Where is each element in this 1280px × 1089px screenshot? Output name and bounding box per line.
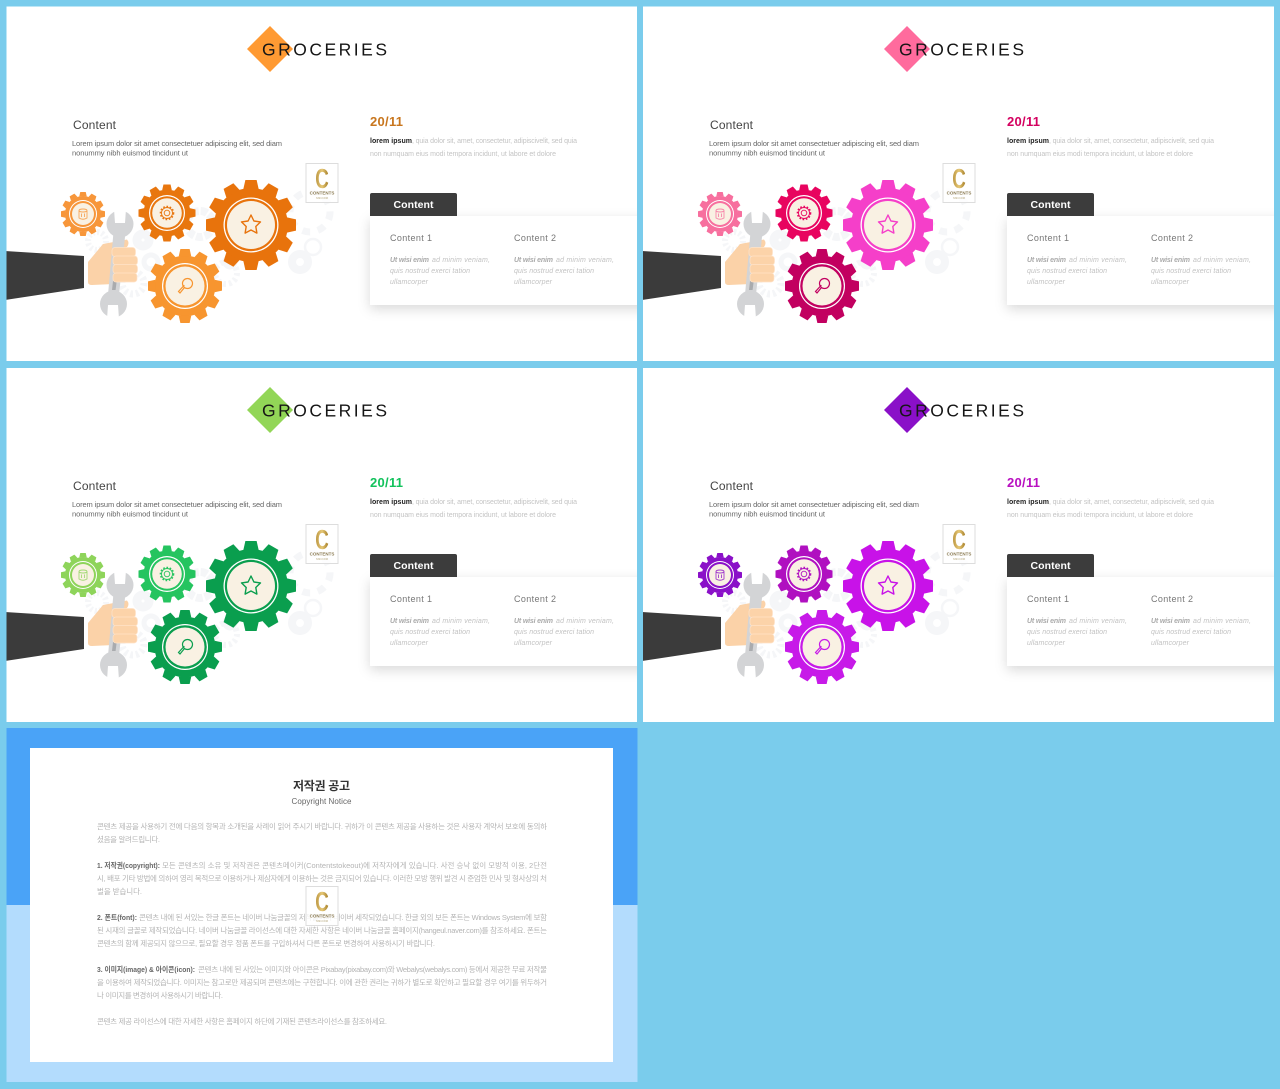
column 1 xyxy=(1027,594,1127,647)
gear: settings xyxy=(776,546,832,602)
logo stamp: C xyxy=(952,525,966,555)
background gears xyxy=(88,192,330,294)
column 1 xyxy=(390,233,490,286)
column 1: Content 1 xyxy=(1027,233,1069,243)
tab xyxy=(1007,193,1094,216)
date description xyxy=(370,499,577,519)
title: GROCERIES xyxy=(262,400,387,420)
tab xyxy=(370,193,457,216)
background gears xyxy=(725,553,967,655)
gear: star xyxy=(206,180,296,270)
tab xyxy=(370,554,457,577)
date description: lorem ipsum xyxy=(370,499,412,506)
left body text: Lorem ipsum dolor sit amet consectetuer adipiscing elit, sed diam xyxy=(72,139,282,148)
left body text xyxy=(72,139,282,158)
notice closing line: 콘텐츠 제공 라이선스에 대한 자세한 사항은 홈페이지 하단에 기재된 콘텐츠라이선스를 참조하세요. xyxy=(97,1016,387,1026)
left body text: nonummy nibh euismod tincidunt ut xyxy=(72,148,189,158)
left body text: Lorem ipsum dolor sit amet consectetuer adipiscing elit, sed diam xyxy=(709,139,919,148)
left body text: nonummy nibh euismod tincidunt ut xyxy=(709,510,826,518)
logo stamp: C xyxy=(952,164,966,194)
date description: lorem ipsum xyxy=(1007,138,1049,145)
notice clause 3: 을 이용하여 제작되었습니다. 이미지는 참고로만 제공되며 콘텐츠에는 구현합니다. 이에 관한 권리는 귀하가 별도로 확인하고 필요할 경우 여기를 위두하거 xyxy=(97,977,547,987)
left body text xyxy=(72,500,282,518)
notice clause 1: 시, 배포 기타 방법에 의하여 영리 목적으로 이용하거나 제삼자에게 이용하는 것은 금지되어 있습니다. 이러한 모방 행위 발견 시 준엄한 민사 및 형사상의 처 xyxy=(97,873,547,883)
date: 20/11 xyxy=(370,475,403,490)
tab: Content xyxy=(1030,199,1071,211)
column 1: Ut wisi enim xyxy=(1027,257,1066,264)
arm with wrench xyxy=(5,209,138,319)
notice clause 1: 모든 콘텐츠의 소유 및 저작권은 콘텐츠메이커(Contentstokeout)에 저작자에게 있습니다. 사전 승낙 없이 모방적 이용, 2단전 xyxy=(162,860,547,870)
card xyxy=(1007,216,1280,305)
left heading: Content xyxy=(73,118,117,132)
logo stamp xyxy=(306,886,338,926)
arm with wrench xyxy=(642,209,774,319)
gear: search xyxy=(148,610,222,684)
date description: , quia dolor sit, amet, consectetur, adipiscivelit, sed quia xyxy=(1049,499,1214,506)
date description xyxy=(1007,138,1214,158)
date description: non numquam eius modi tempora incidunt, ut labore et dolore xyxy=(1007,512,1193,519)
column 2: quis nostrud exerci tation xyxy=(514,268,594,275)
icon: orange diamond xyxy=(247,26,293,72)
logo stamp: CONTENTS xyxy=(947,190,971,196)
panel: pink groceries slide xyxy=(642,6,1280,362)
logo stamp: NNN.COM xyxy=(316,920,328,923)
column 1: ad minim veniam, xyxy=(432,618,490,625)
column 1: Content 1 xyxy=(390,233,432,243)
gear: trash xyxy=(61,553,105,597)
title: GROCERIES xyxy=(899,400,1024,420)
column 1: quis nostrud exerci tation xyxy=(390,268,470,275)
notice clause 2: 2. 폰트(font): xyxy=(97,913,137,922)
logo stamp: C xyxy=(315,887,329,917)
logo stamp: CONTENTS xyxy=(310,552,334,556)
gear: settings xyxy=(138,184,196,242)
column 1: quis nostrud exerci tation xyxy=(1027,268,1107,275)
column 2: ad minim veniam, xyxy=(1193,257,1251,264)
notice intro xyxy=(97,821,547,844)
logo stamp xyxy=(306,524,338,564)
column 2: quis nostrud exerci tation xyxy=(1151,629,1231,636)
left body text xyxy=(709,500,919,518)
date description: , quia dolor sit, amet, consectetur, adipiscivelit, sed quia xyxy=(412,138,577,145)
column 1: ullamcorper xyxy=(390,640,429,647)
column 2: Content 2 xyxy=(1151,594,1193,604)
column 1: Content 1 xyxy=(1027,594,1069,604)
background gears xyxy=(88,553,330,655)
left heading: Content xyxy=(710,118,754,132)
notice clause 3: 3. 이미지(image) & 아이콘(icon): xyxy=(97,964,195,974)
gear: search xyxy=(785,249,859,323)
date description: non numquam eius modi tempora incidunt, ut labore et dolore xyxy=(370,512,556,519)
date description: non numquam eius modi tempora incidunt, ut labore et dolore xyxy=(370,151,556,158)
notice clause 1: 벌을 받습니다. xyxy=(97,886,142,896)
logo stamp: C xyxy=(315,525,329,555)
gear: star xyxy=(843,541,933,631)
gear: search xyxy=(785,610,859,684)
column 2 xyxy=(1151,594,1251,647)
tab: Content xyxy=(394,199,434,211)
icon: green diamond xyxy=(247,387,293,433)
date: 20/11 xyxy=(370,114,403,129)
column 1 xyxy=(1027,233,1127,286)
column 2: ad minim veniam, xyxy=(1193,618,1251,625)
logo stamp: NNN.COM xyxy=(316,197,328,200)
date description: non numquam eius modi tempora incidunt, ut labore et dolore xyxy=(1007,151,1193,158)
tab xyxy=(1007,554,1094,577)
title: GROCERIES xyxy=(262,40,387,60)
left body text: nonummy nibh euismod tincidunt ut xyxy=(709,148,826,158)
icon: pink diamond xyxy=(884,26,930,72)
column 1: ullamcorper xyxy=(1027,640,1066,647)
logo stamp: CONTENTS xyxy=(310,914,334,918)
column 1: quis nostrud exerci tation xyxy=(390,629,470,636)
column 2 xyxy=(514,594,614,647)
logo stamp xyxy=(943,164,975,202)
date description xyxy=(370,138,577,158)
column 1: ad minim veniam, xyxy=(1069,257,1127,264)
column 2: Ut wisi enim xyxy=(1151,257,1190,264)
column 2: quis nostrud exerci tation xyxy=(514,629,594,636)
gear: trash xyxy=(698,553,742,597)
column 2: ad minim veniam, xyxy=(556,618,614,625)
column 2: ullamcorper xyxy=(514,640,553,647)
logo stamp: CONTENTS xyxy=(947,552,971,556)
left heading: Content xyxy=(710,479,754,493)
logo stamp xyxy=(943,524,975,564)
column 2: Content 2 xyxy=(514,233,556,243)
left body text: Lorem ipsum dolor sit amet consectetuer adipiscing elit, sed diam xyxy=(72,500,282,509)
card xyxy=(370,216,650,305)
logo stamp: CONTENTS xyxy=(310,190,334,196)
date description xyxy=(1007,499,1214,519)
left body text xyxy=(709,139,919,158)
left body text: nonummy nibh euismod tincidunt ut xyxy=(72,510,189,518)
notice intro: 콘텐츠 제공을 사용하기 전에 다음의 항목과 소개된을 사례이 읽어 주시기 바랍니다. 귀하가 이 콘텐츠 제공을 사용하는 것은 사용자 계약서 보호에 동의하 xyxy=(97,821,547,831)
gear: settings xyxy=(138,546,196,602)
column 2: Ut wisi enim xyxy=(514,257,553,264)
logo stamp: NNN.COM xyxy=(953,197,965,200)
notice clause 2: 콘텐츠 내에 된 서있는 한글 폰트는 네이버 나눔글꼴의 저작물이며 네이버 세작되었습니다. 한글 외의 보든 폰트는 Windows System에 보함 xyxy=(139,912,547,922)
gear: star xyxy=(843,180,933,270)
column 1: ullamcorper xyxy=(1027,279,1066,286)
column 1: Ut wisi enim xyxy=(390,257,429,264)
gear: trash xyxy=(61,192,105,236)
notice clause 1 xyxy=(97,860,547,896)
notice clause 3 xyxy=(97,964,547,1000)
column 1: ad minim veniam, xyxy=(432,257,490,264)
column 1: quis nostrud exerci tation xyxy=(1027,629,1107,636)
panel: copyright notice xyxy=(6,728,638,1082)
notice clause 2: 된 시재의 글꼴로 제작되었습니다. 네이버 나눔글꼴 라이선스에 대한 자세한 사항은 네이버 나눔글꼴 홈페이지(hangeul.naver.com)를 참조하세요. 폰트는 xyxy=(97,925,547,935)
date description: lorem ipsum xyxy=(1007,499,1049,506)
column 2: Ut wisi enim xyxy=(1151,618,1190,625)
column 2: ad minim veniam, xyxy=(556,257,614,264)
arm with wrench xyxy=(642,570,774,680)
logo stamp: NNN.COM xyxy=(316,558,328,561)
card xyxy=(370,577,650,666)
logo stamp: NNN.COM xyxy=(953,558,965,561)
date description: , quia dolor sit, amet, consectetur, adipiscivelit, sed quia xyxy=(1049,138,1214,145)
column 1: Ut wisi enim xyxy=(1027,618,1066,625)
column 2: ullamcorper xyxy=(1151,279,1190,286)
date description: lorem ipsum xyxy=(370,138,412,145)
title: GROCERIES xyxy=(899,40,1024,60)
column 1 xyxy=(390,594,490,647)
gear: settings xyxy=(776,184,832,242)
card xyxy=(1007,577,1280,666)
column 2 xyxy=(1151,233,1251,286)
left heading: Content xyxy=(73,479,117,493)
column 2: quis nostrud exerci tation xyxy=(1151,268,1231,275)
notice clause 1: 1. 저작권(copyright): xyxy=(97,860,160,870)
logo stamp: C xyxy=(315,164,329,194)
gear: trash xyxy=(698,192,742,236)
logo stamp xyxy=(306,164,338,202)
gear: search xyxy=(148,249,222,323)
column 2: ullamcorper xyxy=(514,279,553,286)
date: 20/11 xyxy=(1007,475,1040,490)
panel: purple groceries slide xyxy=(642,368,1280,722)
column 2: Ut wisi enim xyxy=(514,618,553,625)
column 1: ad minim veniam, xyxy=(1069,618,1127,625)
notice clause 3: 콘텐츠 내에 된 사있는 이미지와 아이콘은 Pixabay(pixabay.com)와 Webalys(webalys.com) 등에서 제공한 무료 저작물 xyxy=(198,964,547,974)
icon: purple diamond xyxy=(884,387,930,433)
panel: orange groceries slide xyxy=(5,6,650,362)
notice title: 저작권 공고 xyxy=(293,778,350,793)
column 1: Content 1 xyxy=(390,594,432,604)
gear: star xyxy=(206,541,296,631)
panel: green groceries slide xyxy=(5,368,650,722)
column 1: Ut wisi enim xyxy=(390,618,429,625)
date: 20/11 xyxy=(1007,114,1040,129)
column 2: Content 2 xyxy=(514,594,556,604)
column 2: Content 2 xyxy=(1151,233,1193,243)
tab: Content xyxy=(1030,560,1071,572)
date description: , quia dolor sit, amet, consectetur, adipiscivelit, sed quia xyxy=(412,499,577,506)
background gears xyxy=(725,192,967,294)
column 2: ullamcorper xyxy=(1151,640,1190,647)
left body text: Lorem ipsum dolor sit amet consectetuer adipiscing elit, sed diam xyxy=(709,500,919,509)
column 1: ullamcorper xyxy=(390,279,429,286)
tab: Content xyxy=(394,560,434,572)
notice intro: 셨음을 알려드립니다. xyxy=(97,834,160,844)
notice clause 2 xyxy=(97,912,547,948)
arm with wrench xyxy=(5,570,138,680)
column 2 xyxy=(514,233,614,286)
notice clause 3: 나 이미지를 변경하여 사용하시기 바랍니다. xyxy=(97,990,223,1000)
notice subtitle: Copyright Notice xyxy=(292,797,352,806)
notice clause 2: 콘텐츠의 함께 제공되지 않으므로, 필요할 경우 정품 폰트를 구입하셔서 다른 폰트로 변경하여 사용하시기 바랍니다. xyxy=(97,938,435,948)
